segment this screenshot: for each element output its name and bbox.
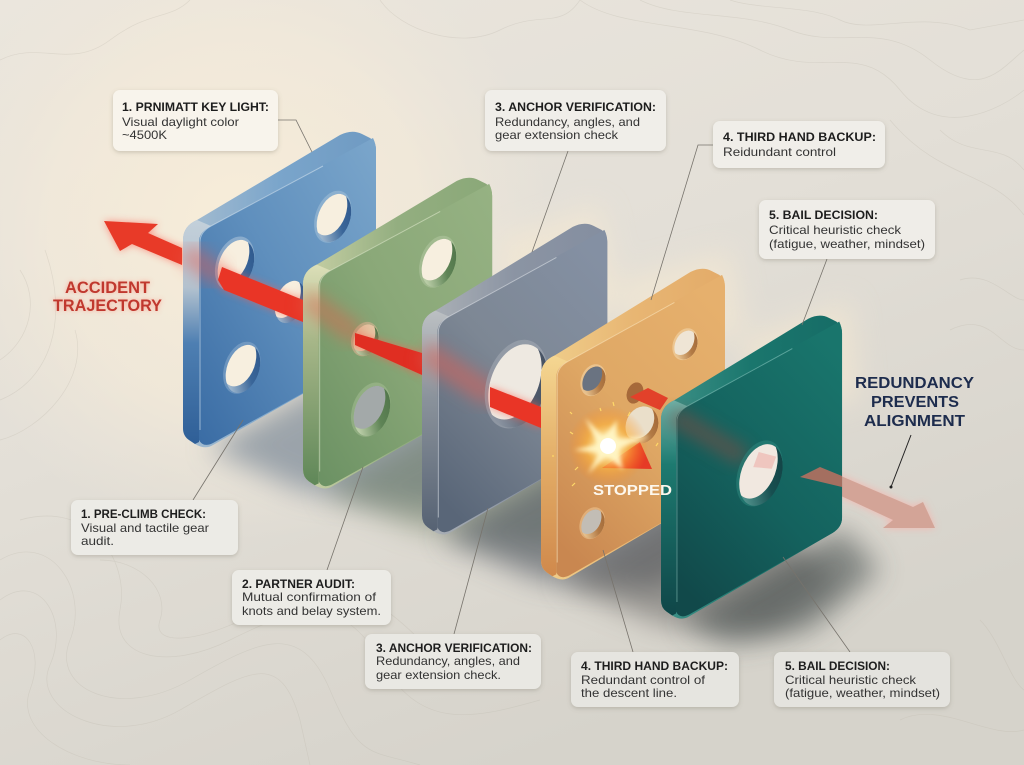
- label: redundancy prevents alignment: REDUNDANCY: [855, 375, 974, 392]
- callout: bottom 1 pre-climb check: 1. PRE-CLIMB CHECK:: [81, 507, 206, 521]
- ground shadows: [207, 352, 880, 645]
- callout: bottom 5 bail decision: (fatigue, weather, mindset): [785, 686, 940, 700]
- plate 4 hole: upper left: [580, 364, 606, 396]
- label: redundancy prevents alignment: [855, 375, 974, 430]
- plate 1 hole: lower: [223, 342, 260, 394]
- impact starburst: [552, 402, 658, 486]
- callout: bottom 5 bail decision: [774, 652, 950, 707]
- callout: top 4 third hand backup: Reidundant control: [723, 145, 836, 159]
- plate 1 hole: centre: [275, 280, 303, 323]
- callout: top 5 bail decision: [759, 200, 935, 259]
- warm glow behind plates: [500, 205, 860, 420]
- label: redundancy prevents alignment: ALIGNMENT: [864, 413, 965, 430]
- plate 4 hole: centre large: [626, 406, 658, 444]
- callout: bottom 5 bail decision: 5. BAIL DECISION:: [785, 659, 890, 673]
- beam through blue plate: [218, 267, 303, 322]
- callout: top 3 anchor verification: [485, 90, 666, 151]
- callout: bottom 2 partner audit: Mutual confirmation of: [242, 590, 377, 604]
- faded beam on teal plate: [672, 415, 745, 458]
- callout: top 5 bail decision: 5. BAIL DECISION:: [769, 208, 878, 222]
- red tint on grey plate: [424, 352, 492, 396]
- callout: bottom 2 partner audit: 2. PARTNER AUDIT:: [242, 577, 355, 591]
- label: accident trajectory: TRAJECTORY: [53, 297, 162, 315]
- callout: bottom 3 anchor verification: [365, 634, 541, 689]
- plate 1 hole: upper right: [314, 190, 352, 243]
- plate 2 hole: centre: [351, 322, 379, 356]
- callout: top 1 primary key light: [113, 90, 278, 151]
- callout: top 3 anchor verification: Redundancy, angles, and: [495, 115, 640, 129]
- callout: top 4 third hand backup: 4. THIRD HAND BACKUP:: [723, 130, 876, 144]
- plate 4 hole: upper right: [672, 328, 698, 360]
- stopped arrowhead: [602, 442, 652, 469]
- callout: top 5 bail decision: Critical heuristic check: [769, 223, 902, 237]
- plate 5: teal: [661, 316, 842, 619]
- callout: bottom 4 third hand backup: Redundant control of: [581, 673, 706, 687]
- label: redundancy prevents alignment: PREVENTS: [871, 394, 959, 411]
- plate 1 hole: upper left: [215, 236, 254, 290]
- callout: bottom 3 anchor verification: Redundancy, angles, and: [376, 654, 520, 668]
- pointer: redundancy to exit arrow: [890, 435, 911, 488]
- stopped label: STOPPED: [593, 483, 672, 499]
- callout: bottom 4 third hand backup: [571, 652, 739, 707]
- callout: top 5 bail decision: (fatigue, weather, mindset): [769, 237, 925, 251]
- leader lines: [193, 120, 850, 652]
- callout: bottom 3 anchor verification: 3. ANCHOR VERIFICATION:: [376, 641, 532, 655]
- plate 4: orange: [541, 269, 725, 580]
- red tint on green plate: [305, 298, 358, 336]
- callout: top 1 primary key light: Visual daylight color: [122, 115, 239, 129]
- plate 5 hole: centre: [736, 440, 782, 506]
- plate 2 hole: upper: [419, 236, 456, 288]
- callout: top 1 primary key light: ~4500K: [122, 128, 167, 142]
- beam: left arrow: [104, 221, 182, 265]
- callout: bottom 2 partner audit: [232, 570, 391, 625]
- callout: top 3 anchor verification: gear extension check: [495, 128, 619, 142]
- callout: bottom 4 third hand backup: the descent line.: [581, 686, 677, 700]
- plate 1: blue: [183, 132, 376, 447]
- beam through green plate: [355, 333, 422, 375]
- label: accident trajectory: ACCIDENT: [65, 279, 150, 297]
- plate 3: grey: [422, 224, 607, 535]
- callout: bottom 1 pre-climb check: audit.: [81, 534, 114, 548]
- red tint on blue plate: [185, 252, 222, 278]
- callout: bottom 3 anchor verification: gear extension check.: [376, 668, 501, 682]
- plate 3 hole: large centre: [484, 340, 546, 428]
- callout: bottom 1 pre-climb check: [71, 500, 238, 555]
- faded beam start on teal plate: [800, 467, 842, 487]
- label: accident trajectory: [53, 279, 162, 315]
- callout: top 4 third hand backup: [713, 121, 885, 168]
- beam fragment past the plate: [630, 388, 668, 410]
- callout: top 1 primary key light: 1. PRNIMATT KEY LIGHT:: [122, 100, 269, 114]
- callout: top 3 anchor verification: 3. ANCHOR VERIFICATION:: [495, 100, 656, 114]
- callout: bottom 1 pre-climb check: Visual and tactile gear: [81, 521, 209, 535]
- plate 4 hole: lower: [579, 507, 605, 539]
- plate 4 hole: centre small: [626, 382, 644, 404]
- callout: bottom 2 partner audit: knots and belay system.: [242, 604, 381, 618]
- plate 2: green: [303, 178, 492, 489]
- beam through grey plate: [490, 387, 541, 428]
- callout: bottom 4 third hand backup: 4. THIRD HAND BACKUP:: [581, 659, 728, 673]
- faded exit arrow: [800, 467, 935, 528]
- callout: bottom 5 bail decision: Critical heuristic check: [785, 673, 917, 687]
- plate 2 hole: lower: [351, 382, 390, 437]
